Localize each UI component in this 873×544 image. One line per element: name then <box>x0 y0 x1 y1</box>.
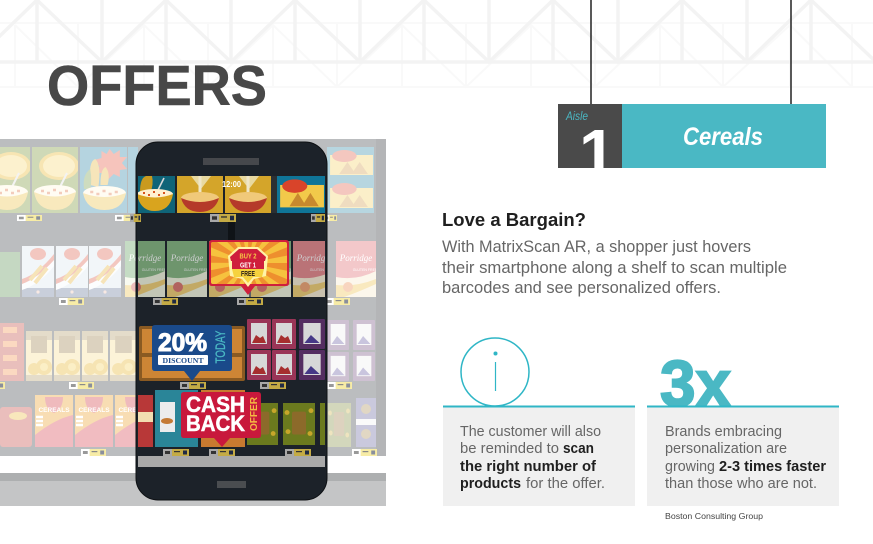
panel: reminder card <box>443 338 635 506</box>
personalization text: 2-3 times faster <box>719 459 826 475</box>
stat: 3x: 3x <box>660 347 731 420</box>
reminder text <box>460 424 605 492</box>
phone row 1 products <box>137 176 325 213</box>
sign hanging wires <box>591 0 791 104</box>
offer: 20% discount today: TODAY <box>212 330 228 364</box>
offer: buy 2 get 1 free <box>209 238 289 295</box>
intro text: barcodes and see personalized offers. <box>442 278 721 297</box>
sign name panel <box>622 104 826 168</box>
icon: info circle <box>461 338 529 406</box>
personalization text: growing <box>665 459 715 475</box>
aisle sign <box>558 0 826 168</box>
sign name panel: Cereals <box>683 123 763 151</box>
shelf front strip <box>0 456 386 473</box>
offer: cash back <box>181 392 261 447</box>
shelf floor <box>0 481 386 506</box>
phone clock: 12:00 <box>222 179 241 189</box>
offer: 20% discount today: DISCOUNT <box>162 356 204 365</box>
heading: Love a Bargain? <box>442 210 586 230</box>
reminder text: the right number of <box>460 459 596 475</box>
intro text <box>442 237 787 297</box>
reminder text: be reminded to <box>460 441 559 457</box>
offer: cash back: BACK <box>186 411 245 436</box>
side column <box>376 139 386 456</box>
shelf price tags <box>0 215 377 456</box>
shelf row 2 products <box>0 241 378 297</box>
sign number panel: Aisle <box>565 111 588 123</box>
phone row 3 bread crates <box>139 326 245 381</box>
offer: 20% discount today <box>152 325 232 381</box>
shelf row 4 products <box>0 395 376 447</box>
phone price tags <box>130 214 325 456</box>
phone row 4 products <box>138 390 325 447</box>
reminder text: products <box>460 476 521 492</box>
reminder text: for the offer. <box>526 476 605 492</box>
phone row 3 jam jars <box>247 319 325 380</box>
phone home button <box>217 481 246 488</box>
shelf row 1 products <box>0 147 374 213</box>
offer: cash back: CASH <box>186 392 245 417</box>
reminder text: scan <box>563 441 594 457</box>
phone row 2 products <box>138 241 325 297</box>
phone speaker <box>203 158 259 165</box>
sign number panel: 1 <box>579 116 616 190</box>
phone shelf strip <box>138 456 325 467</box>
panel: dimmed store shelf <box>0 139 386 506</box>
shelf post <box>228 214 235 241</box>
offer: buy 2 get 1 free: BUY 2 <box>240 254 257 260</box>
source note: Boston Consulting Group <box>665 512 764 521</box>
shelf row 3 products <box>0 320 375 381</box>
personalization text <box>665 424 826 492</box>
intro text: their smartphone along a shelf to scan multiple <box>442 258 787 277</box>
roof truss background <box>0 0 873 87</box>
offer: 20% discount today: 20% <box>158 329 207 357</box>
shelf base <box>0 473 386 481</box>
panel: personalization card <box>647 347 839 506</box>
sign number panel <box>558 104 622 168</box>
offer: buy 2 get 1 free: FREE <box>241 271 255 278</box>
personalization text: Brands embracing <box>665 424 782 440</box>
title: OFFERS <box>47 54 267 118</box>
offer: buy 2 get 1 free: GET 1 <box>240 262 256 270</box>
personalization text: than those who are not. <box>665 476 817 492</box>
intro text: With MatrixScan AR, a shopper just hovers <box>442 237 751 256</box>
phone body <box>136 142 327 500</box>
offer: cash back: OFFER <box>248 397 260 431</box>
personalization text: personalization are <box>665 441 787 457</box>
phone <box>125 142 335 500</box>
reminder text: The customer will also <box>460 424 601 440</box>
white wash over shelf <box>0 139 386 506</box>
